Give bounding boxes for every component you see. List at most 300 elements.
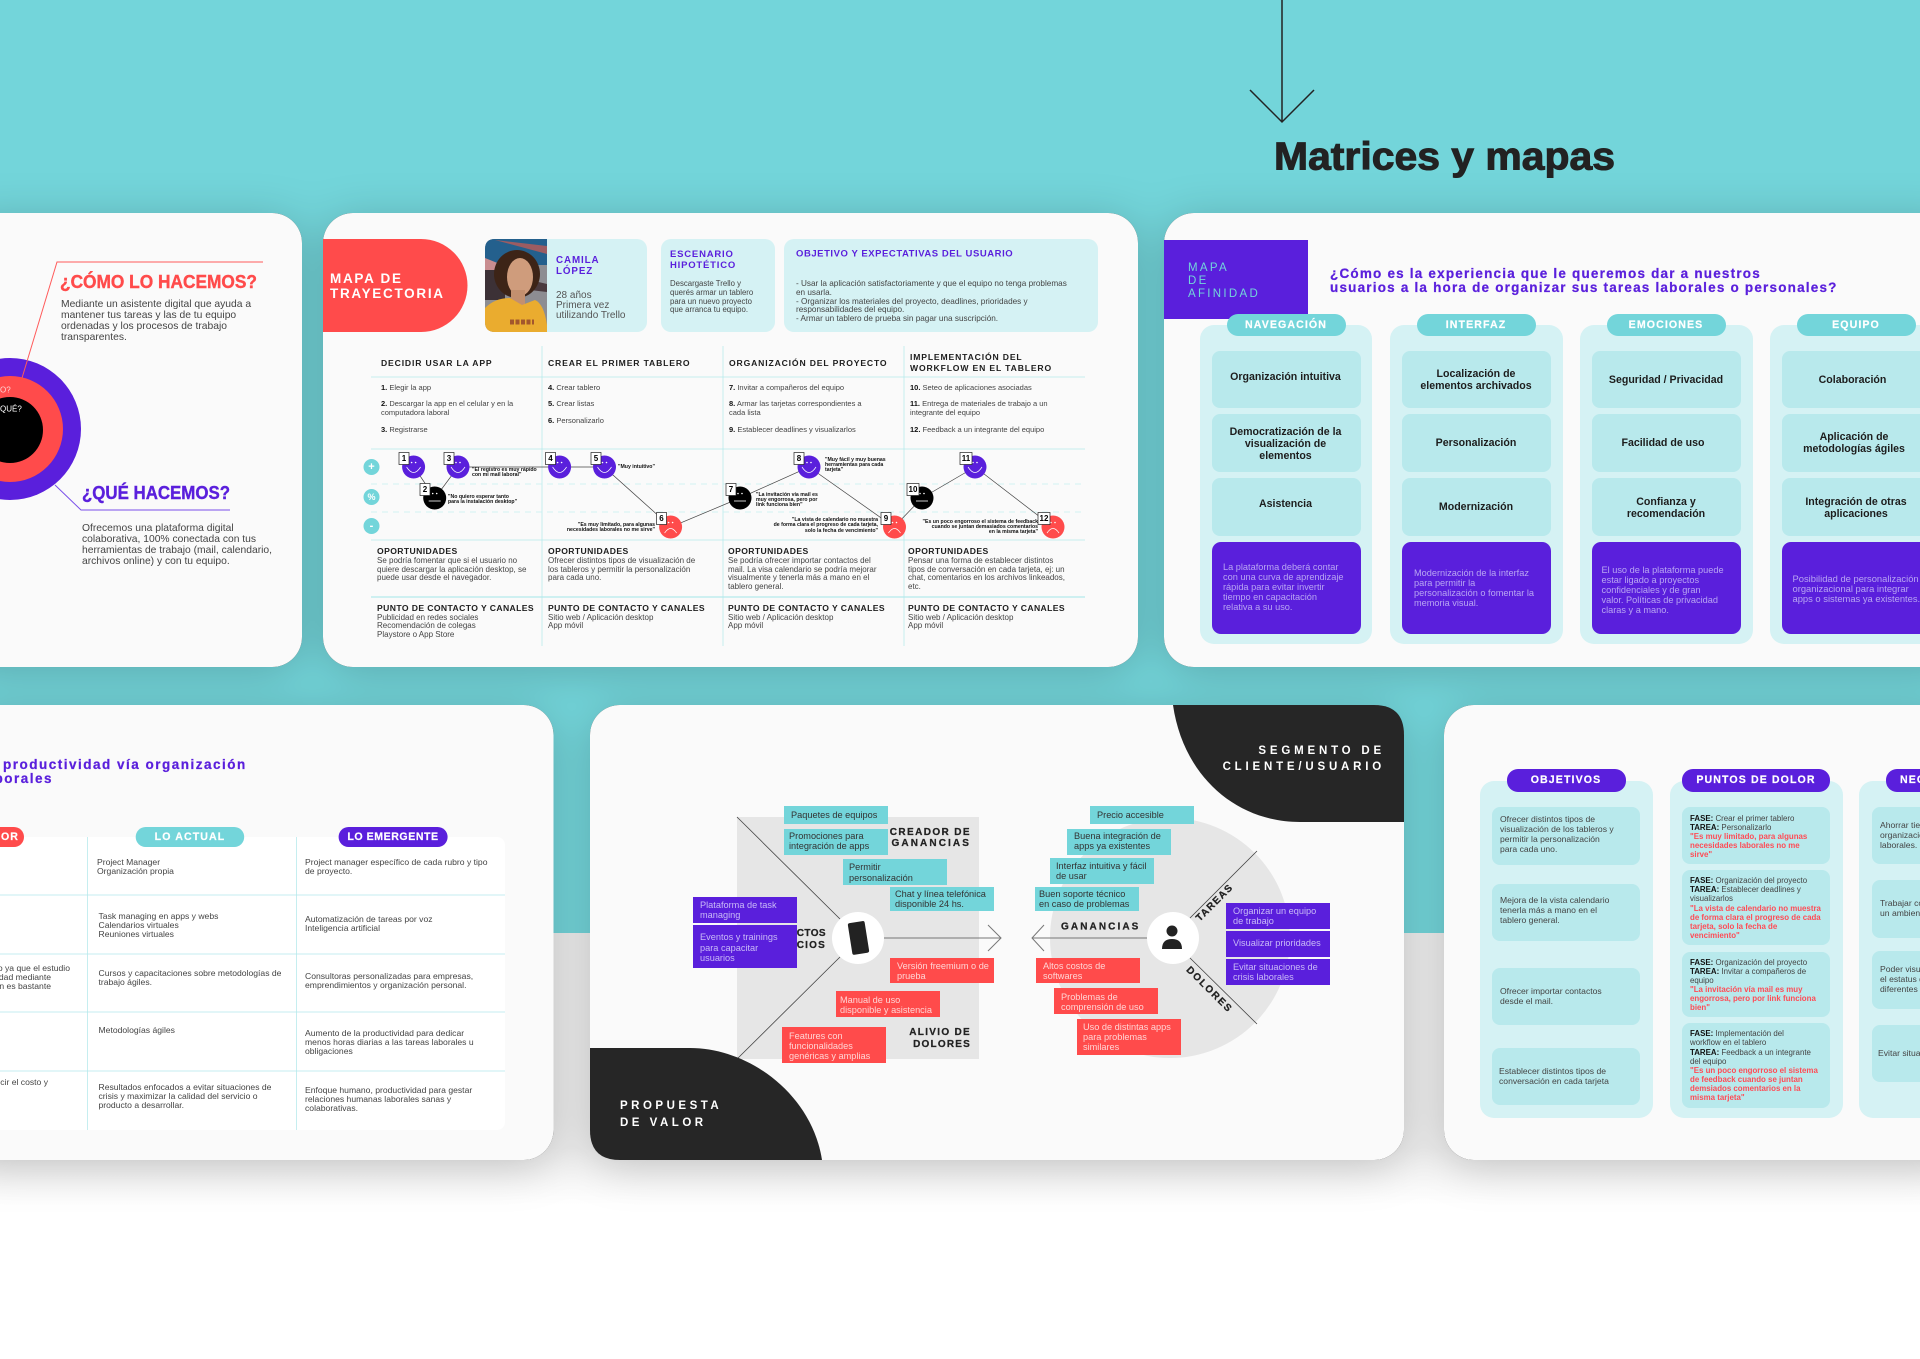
pill: lo anterior: OR	[1, 831, 19, 843]
user quotes	[448, 457, 1039, 535]
column: puntos de dolor: TAREA: Personalizarlo	[1690, 822, 1771, 832]
card: escenario hipotético: ESCENARIO	[670, 248, 734, 260]
user quotes: necesidades laborales no me sirve"	[567, 527, 656, 533]
user quotes: solo la fecha de vencimiento"	[805, 528, 879, 534]
column: puntos de dolor: de forma clara el progreso de cada	[1690, 912, 1821, 922]
panel: productividad table	[0, 705, 554, 1160]
user quotes: "El registro es muy rápido	[472, 467, 537, 473]
tasks: Visualizar prioridades	[1233, 938, 1321, 948]
column: emociones: confidenciales y de gran	[1602, 585, 1701, 595]
column: navegación: Democratización de la	[1230, 426, 1342, 438]
punto de contacto row: PUNTO DE CONTACTO Y CANALES	[908, 603, 1065, 613]
column: emociones: Seguridad / Privacidad	[1609, 374, 1723, 386]
user quotes: herramientas para cada	[825, 462, 883, 468]
card: persona	[485, 239, 647, 332]
step numbers: 9	[884, 514, 889, 523]
column: interfaz: elementos archivados	[1420, 380, 1532, 392]
gains: Interfaz intuitiva y fácil	[1056, 861, 1146, 871]
user quotes: "La vista de calendario no muestra	[792, 517, 878, 523]
column: lo emergente: emprendimientos y organización personal.	[305, 980, 466, 990]
column: necesidades: laborales.	[1880, 840, 1917, 850]
oportunidades row	[377, 546, 1065, 590]
value map square: DOLORES	[913, 1038, 971, 1050]
column: emociones: claras y a mano.	[1602, 605, 1669, 615]
step numbers: 10	[909, 485, 918, 494]
column: equipo: Colaboración	[1819, 374, 1886, 386]
heading: mapa de afinidad: MAPA	[1188, 262, 1229, 274]
phase headers: CREAR EL PRIMER TABLERO	[548, 358, 690, 368]
gain creators: personalización	[849, 873, 913, 883]
column: equipo: organizacional para integrar	[1792, 582, 1909, 594]
column: lo actual: Resultados enfocados a evitar situaciones de	[98, 1082, 272, 1092]
pill: lo actual	[136, 827, 244, 847]
column: equipo: metodologías ágiles	[1803, 443, 1905, 455]
panel: mapa de afinidad	[1164, 213, 1920, 667]
column: equipo: aplicaciones	[1824, 508, 1888, 520]
column: puntos de dolor	[1670, 769, 1843, 1118]
punto de contacto row: PUNTO DE CONTACTO Y CANALES	[377, 603, 534, 613]
column: equipo: Integración de otras	[1805, 496, 1907, 508]
steps list: 3. Registrarse	[381, 424, 428, 434]
column: puntos de dolor: TAREA: Invitar a compañeros de	[1690, 966, 1806, 976]
text: qué hacemos: herramientas de trabajo (mail, calendario,	[82, 544, 272, 556]
column: lo emergente: obligaciones	[305, 1046, 353, 1056]
column: interfaz: Modernización	[1439, 501, 1513, 513]
gain creators: disponible 24 hs.	[895, 899, 964, 909]
card: objetivo y expectativas: - Armar un tablero de prueba sin pagar una suscripción.	[796, 314, 998, 322]
pains: Problemas de	[1061, 992, 1118, 1002]
punto de contacto row: Recomendación de colegas	[377, 620, 476, 630]
column: lo emergente	[305, 857, 488, 1113]
column: puntos de dolor: equipo	[1690, 976, 1714, 984]
column: puntos de dolor: TAREA: Feedback a un integrante	[1690, 1048, 1811, 1056]
oportunidades row: para cada uno.	[548, 572, 601, 582]
gain creators: Paquetes de equipos	[791, 810, 878, 820]
oportunidades row: Se podría ofrecer importar contactos del	[728, 556, 871, 564]
heading: cómo lo hacemos: ¿CÓMO LO HACEMOS?	[60, 271, 257, 292]
chart: emotion journey	[364, 452, 1064, 538]
pill: lo actual: LO ACTUAL	[155, 831, 225, 843]
heading: mapa de trayectoria: MAPA DE	[330, 270, 403, 286]
oportunidades row: tablero general.	[728, 582, 784, 590]
steps list: 11. Entrega de materiales de trabajo a un	[910, 398, 1048, 408]
column: emociones: Confianza y	[1636, 496, 1696, 508]
column: puntos de dolor: TAREA: Establecer deadlines y	[1690, 884, 1801, 894]
tasks: crisis laborales	[1233, 972, 1294, 982]
gain creators: Chat y línea telefónica	[895, 889, 987, 899]
text: cómo lo hacemos: transparentes.	[61, 332, 127, 342]
steps list: computadora laboral	[381, 408, 450, 416]
customer profile circle: DOLORES	[1184, 965, 1234, 1015]
column: objetivos: conversación en cada tarjeta	[1499, 1076, 1609, 1086]
punto de contacto row: Playstore o App Store	[377, 630, 455, 638]
customer profile circle: GANANCIAS	[1061, 922, 1140, 932]
column: navegación: elementos	[1259, 450, 1312, 462]
corner: propuesta de valor: PROPUESTA	[620, 1100, 722, 1112]
pains: similares	[1083, 1042, 1120, 1052]
column: lo anterior: dad mediante	[0, 972, 51, 982]
column: interfaz: INTERFAZ	[1446, 319, 1506, 331]
legend icons: +	[368, 461, 375, 473]
step numbers: 11	[962, 454, 971, 463]
column: objetivos: Ofrecer distintos tipos de	[1500, 814, 1595, 824]
steps list: 10. Seteo de aplicaciones asociadas	[910, 382, 1032, 392]
column: equipo: EQUIPO	[1832, 319, 1880, 331]
oportunidades row: etc.	[908, 582, 921, 590]
steps list	[381, 382, 1048, 434]
gain creators: Promociones para	[789, 831, 864, 841]
user quotes: de forma clara el progreso de cada tarjeta,	[774, 522, 879, 528]
column: puntos de dolor: misma tarjeta"	[1690, 1092, 1745, 1102]
column: interfaz	[1390, 314, 1563, 644]
card: escenario hipotético: querés armar un tablero	[670, 288, 754, 296]
column: puntos de dolor: FASE: Organización del proyecto	[1690, 958, 1807, 966]
column: interfaz: para permitir la	[1414, 578, 1476, 588]
column: navegación: con una curva de aprendizaje	[1223, 572, 1344, 582]
corner: propuesta de valor: DE VALOR	[620, 1117, 707, 1129]
tasks: de trabajo	[1233, 916, 1274, 926]
user quotes: tarjeta"	[825, 467, 844, 473]
corner: segmento de cliente: SEGMENTO DE	[1258, 745, 1385, 757]
pain relievers: Features con	[789, 1031, 843, 1041]
icon: phone	[832, 912, 884, 964]
card: escenario hipotético: HIPOTÉTICO	[670, 260, 736, 270]
punto de contacto row: App móvil	[548, 620, 583, 630]
column: lo anterior	[0, 963, 70, 1087]
products and services: usuarios	[700, 953, 735, 963]
column: lo emergente: Enfoque humano, productividad para gestar	[305, 1085, 472, 1095]
column: objetivos: OBJETIVOS	[1531, 774, 1601, 786]
column: puntos de dolor: del equipo	[1690, 1056, 1727, 1066]
gains: Buena integración de	[1074, 831, 1161, 841]
oportunidades row: mail. La visa calendario se podría mejorar	[728, 564, 877, 574]
steps list: 7. Invitar a compañeros del equipo	[729, 382, 844, 392]
pill: lo emergente: LO EMERGENTE	[347, 831, 439, 843]
pain relievers: disponible y asistencia	[840, 1005, 933, 1015]
column: lo emergente: menos horas diarias a las tareas laborales u	[305, 1037, 474, 1047]
user quotes: "Muy fácil y muy buenas	[825, 457, 886, 463]
oportunidades row: Se podría fomentar que si el usuario no	[377, 556, 518, 564]
column: equipo	[1770, 314, 1920, 644]
column: emociones: valor. Políticas de privacidad	[1602, 595, 1718, 605]
column: lo emergente: Aumento de la productividad para dedicar	[305, 1028, 464, 1038]
text: cómo lo hacemos: Mediante un asistente digital que ayuda a	[61, 298, 251, 310]
column: puntos de dolor: de feedback cuando se juntan	[1690, 1074, 1803, 1084]
pain relievers: Manual de uso	[840, 995, 900, 1005]
column: navegación: relativa a su uso.	[1223, 602, 1292, 612]
oportunidades row: puede usar desde el navegador.	[377, 572, 491, 582]
user quotes: "Es un poco engorroso el sistema de feedback	[923, 519, 1038, 525]
panel: purpose circle	[0, 213, 302, 667]
gains: Buen soporte técnico	[1039, 889, 1125, 899]
value map square: GANANCIAS	[892, 838, 971, 848]
card: objetivo y expectativas	[784, 239, 1098, 332]
column: emociones: estar ligado a proyectos	[1602, 575, 1699, 585]
column: puntos de dolor: sirve"	[1690, 850, 1712, 858]
column: emociones: EMOCIONES	[1629, 319, 1703, 331]
customer profile circle: TAREAS	[1194, 882, 1236, 924]
legend icons: %	[367, 492, 376, 502]
tasks	[1226, 903, 1330, 985]
card: objetivo y expectativas: - Usar la aplicación satisfactoriamente y que el equipo no tenga problemas	[796, 278, 1067, 288]
chart: concentric circles: QUÉ?	[0, 404, 22, 414]
oportunidades row: OPORTUNIDADES	[548, 546, 629, 556]
column: lo emergente: relaciones humanas laborales sanas y	[305, 1094, 452, 1104]
punto de contacto row: App móvil	[728, 620, 763, 630]
tasks: Evitar situaciones de	[1233, 962, 1318, 972]
legend icons	[364, 459, 380, 534]
column: objetivos	[1480, 769, 1653, 1118]
step numbers: 3	[447, 454, 452, 463]
card: persona: Primera vez	[556, 300, 609, 310]
connector: cómo	[22, 262, 263, 378]
column: puntos de dolor: engorrosa, pero por link funciona	[1690, 994, 1816, 1002]
products and services: Eventos y trainings	[700, 932, 778, 942]
column: navegación: La plataforma deberá contar	[1223, 562, 1338, 572]
column: puntos de dolor: FASE: Implementación del	[1690, 1028, 1784, 1038]
user quotes: con mi mail laboral"	[472, 472, 522, 478]
question: productividad vía organización	[3, 756, 247, 772]
column: navegación: Asistencia	[1259, 498, 1312, 510]
pains: para problemas	[1083, 1032, 1147, 1042]
column: interfaz: Modernización de la interfaz	[1414, 568, 1529, 578]
user quotes: "No quiero esperar tanto	[448, 494, 509, 500]
oportunidades row: los tableros y permitir la personalización	[548, 564, 690, 574]
emotion faces	[402, 456, 1065, 538]
column: lo anterior: o ya que el estudio	[0, 963, 70, 973]
pain relievers: prueba	[897, 971, 926, 981]
column: puntos de dolor: "La invitación vía mail es muy	[1690, 984, 1803, 994]
column: necesidades	[1859, 769, 1920, 1118]
column: objetivos: visualización de los tableros y	[1500, 824, 1614, 834]
question: ¿Cómo es la experiencia que le queremos dar a nuestros	[1330, 266, 1761, 280]
oportunidades row: OPORTUNIDADES	[908, 546, 989, 556]
card: escenario hipotético: Descargaste Trello y	[670, 278, 741, 288]
column: lo emergente: Inteligencia artificial	[305, 923, 380, 933]
steps list: 1. Elegir la app	[381, 382, 431, 392]
step numbers	[399, 452, 1050, 524]
question: usuarios a la hora de organizar sus tareas laborales o personales?	[1330, 280, 1838, 294]
header arrow	[1250, 0, 1314, 122]
column: objetivos: permitir la personalización	[1500, 834, 1600, 844]
column: lo actual: Calendarios virtuales	[98, 920, 179, 930]
pains: comprensión de uso	[1061, 1002, 1144, 1012]
icon: user	[1147, 912, 1199, 964]
column: puntos de dolor: demsiados comentarios en la	[1690, 1084, 1801, 1092]
oportunidades row: Ofrecer distintos tipos de visualización de	[548, 556, 696, 564]
gains: Precio accesible	[1097, 810, 1164, 820]
column: puntos de dolor: workflow en el tablero	[1689, 1038, 1767, 1046]
text: cómo lo hacemos: mantener tus tareas y las de tu equipo	[61, 310, 236, 320]
column: lo emergente: colaborativas.	[305, 1103, 358, 1113]
pill: lo anterior	[0, 827, 24, 847]
pill: lo emergente	[339, 827, 448, 847]
panel: mapa de trayectoria	[323, 213, 1138, 667]
punto de contacto row: Sitio web / Aplicación desktop	[548, 612, 654, 622]
card: objetivo y expectativas: en usarla.	[796, 288, 832, 296]
card: persona: LÓPEZ	[556, 264, 593, 276]
column: lo actual: producto a desarrollar.	[98, 1100, 184, 1110]
punto de contacto row: PUNTO DE CONTACTO Y CANALES	[548, 603, 705, 613]
phase headers: DECIDIR USAR LA APP	[381, 358, 492, 368]
chart: concentric circles: O?	[0, 386, 11, 394]
column: lo actual: Metodologías ágiles	[98, 1025, 175, 1035]
oportunidades row: OPORTUNIDADES	[377, 546, 458, 556]
user quotes: "La invitación vía mail es	[756, 492, 818, 498]
gains: apps ya existentes	[1074, 841, 1151, 851]
column: objetivos: desde el mail.	[1500, 996, 1553, 1006]
column: lo anterior: n es bastante	[0, 981, 51, 991]
column: interfaz: personalización o fomentar la	[1414, 588, 1535, 598]
heading: mapa de afinidad: AFINIDAD	[1188, 288, 1260, 300]
corner: segmento de cliente	[1173, 705, 1404, 822]
steps list: 4. Crear tablero	[548, 382, 600, 392]
pains	[1036, 958, 1181, 1055]
oportunidades row: tipos de conversación en cada tarjeta, ej: un	[908, 564, 1065, 574]
products and services: Plataforma de task	[700, 900, 777, 910]
gains	[1035, 806, 1194, 911]
steps list: 5. Crear listas	[548, 398, 594, 408]
column: equipo: Aplicación de	[1820, 431, 1889, 443]
punto de contacto row: PUNTO DE CONTACTO Y CANALES	[728, 603, 885, 613]
legend icons: -	[370, 520, 374, 532]
column: objetivos: tablero general.	[1500, 915, 1560, 925]
column: objetivos: para cada uno.	[1500, 844, 1557, 854]
oportunidades row: chat, comentarios en los archivos linkeados,	[908, 572, 1065, 582]
oportunidades row: quiere descargar la aplicación desktop, se	[377, 564, 527, 574]
steps list: 6. Personalizarlo	[548, 416, 604, 424]
user quotes: "Es muy limitado, para algunas	[578, 522, 655, 528]
products and services: managing	[700, 910, 740, 920]
column: objetivos: Mejora de la vista calendario	[1500, 895, 1610, 905]
card: escenario hipotético: que arranca tu equipo.	[670, 304, 748, 314]
column: puntos de dolor: tarjeta, solo la fecha de	[1690, 922, 1778, 930]
chart: concentric circles	[0, 358, 81, 500]
pain relievers	[782, 958, 994, 1063]
step numbers: 2	[423, 485, 428, 494]
steps list: cada lista	[729, 408, 762, 416]
pains: Uso de distintas apps	[1083, 1022, 1171, 1032]
gain creators: Permitir	[849, 862, 881, 872]
step numbers: 1	[402, 454, 407, 463]
text: qué hacemos: archivos online) y con tu equipo.	[82, 556, 230, 566]
step numbers: 7	[729, 485, 734, 494]
phase headers: IMPLEMENTACIÓN DEL	[910, 351, 1023, 362]
text: qué hacemos: colaborativa, 100% conectada con tus	[82, 534, 256, 544]
card: persona: 28 años	[556, 290, 592, 300]
phase headers: ORGANIZACIÓN DEL PROYECTO	[729, 357, 887, 368]
column: navegación: visualización de	[1245, 438, 1326, 450]
column: lo actual	[97, 857, 282, 1110]
punto de contacto row: App móvil	[908, 620, 943, 630]
corner: segmento de cliente: CLIENTE/USUARIO	[1223, 761, 1385, 773]
oportunidades row: Pensar una forma de establecer distintos	[908, 556, 1053, 564]
card: escenario hipotético	[661, 239, 775, 332]
step numbers: 8	[797, 454, 802, 463]
pain relievers: genéricas y amplias	[789, 1051, 871, 1061]
grid lines	[371, 346, 1085, 646]
column: puntos de dolor: FASE: Crear el primer tablero	[1690, 814, 1794, 822]
pains: Altos costos de	[1043, 961, 1105, 971]
customer profile circle	[1050, 818, 1290, 1058]
gains: de usar	[1056, 871, 1087, 881]
column: interfaz: Localización de	[1437, 368, 1516, 380]
column: navegación: rápida para evitar invertir	[1223, 582, 1325, 592]
journey line	[414, 467, 1053, 527]
user quotes: muy engorrosa, pero por	[756, 497, 817, 503]
column: puntos de dolor: vencimiento"	[1690, 930, 1740, 940]
value map square: SERVICIOS	[761, 940, 826, 950]
text: cómo lo hacemos: ordenadas y los procesos de trabajo	[61, 320, 227, 332]
column: emociones: recomendación	[1627, 508, 1705, 520]
column: lo actual: Organización propia	[97, 866, 174, 876]
column: puntos de dolor: bien"	[1690, 1002, 1710, 1012]
punto de contacto row: Sitio web / Aplicación desktop	[908, 612, 1014, 622]
column: puntos de dolor: "Es un poco engorroso el sistema	[1690, 1066, 1818, 1074]
column: puntos de dolor: visualizarlos	[1690, 894, 1733, 902]
column: lo actual: Cursos y capacitaciones sobre metodologías de	[98, 968, 282, 978]
heading: mapa de trayectoria	[323, 239, 468, 332]
column: emociones: Facilidad de uso	[1621, 437, 1705, 449]
gain creators	[784, 806, 994, 911]
value map square: PRODUCTOS	[759, 928, 826, 938]
step numbers: 5	[594, 454, 599, 463]
column: equipo: Posibilidad de personalización	[1792, 572, 1919, 584]
heading: mapa de afinidad: DE	[1188, 275, 1209, 287]
photo: Camila	[485, 239, 547, 332]
column: equipo: apps o sistemas ya existentes.	[1792, 592, 1920, 604]
column: lo emergente: Automatización de tareas por voz	[305, 914, 433, 924]
steps list: 8. Armar las tarjetas correspondientes a	[729, 398, 862, 408]
column: interfaz: Personalización	[1436, 437, 1516, 449]
gains: en caso de problemas	[1039, 899, 1130, 909]
card: objetivo y expectativas: responsabilidades del equipo.	[796, 304, 904, 314]
oportunidades row: visualmente y tenerla más a mano en el	[728, 572, 870, 582]
column: lo actual: Project Manager	[97, 857, 160, 867]
pains: softwares	[1043, 971, 1083, 981]
card: objetivo y expectativas: OBJETIVO Y EXPECTATIVAS DEL USUARIO	[796, 248, 1013, 260]
column: objetivos: tenerla más a mano en el	[1500, 905, 1597, 915]
column: emociones	[1580, 314, 1753, 644]
corner: propuesta de valor	[590, 1048, 822, 1160]
connector: qué	[55, 485, 230, 510]
phase headers	[381, 351, 1052, 373]
column: navegación: NAVEGACIÓN	[1245, 318, 1327, 331]
column: lo emergente: Project manager específico de cada rubro y tipo	[305, 857, 488, 867]
steps list: integrante del equipo	[910, 408, 980, 416]
card: escenario hipotético: para un nuevo proyecto	[670, 296, 753, 306]
text: qué hacemos: Ofrecemos una plataforma digital	[82, 522, 234, 534]
punto de contacto row: Sitio web / Aplicación desktop	[728, 612, 834, 622]
column: puntos de dolor: FASE: Organización del proyecto	[1690, 876, 1807, 884]
column: puntos de dolor: "Es muy limitado, para algunas	[1690, 832, 1808, 840]
products and services: para capacitar	[700, 943, 758, 953]
column: lo actual: trabajo ágiles.	[98, 977, 152, 987]
heading: mapa de trayectoria: TRAYECTORIA	[330, 286, 445, 300]
user quotes: en la misma tarjeta"	[989, 529, 1039, 535]
column: lo actual: Task managing en apps y webs	[98, 911, 218, 921]
column: puntos de dolor: necesidades laborales no me	[1690, 840, 1800, 850]
table	[0, 827, 505, 1130]
value map square	[735, 817, 979, 1061]
card: persona: CAMILA	[556, 254, 600, 266]
pain relievers: funcionalidades	[789, 1041, 853, 1051]
column: objetivos: Ofrecer importar contactos	[1500, 986, 1602, 996]
gain creators: integración de apps	[789, 841, 870, 851]
title: Matrices y mapas	[1274, 136, 1615, 178]
step numbers: 4	[548, 454, 553, 463]
column: puntos de dolor: "La vista de calendario no muestra	[1690, 904, 1822, 912]
